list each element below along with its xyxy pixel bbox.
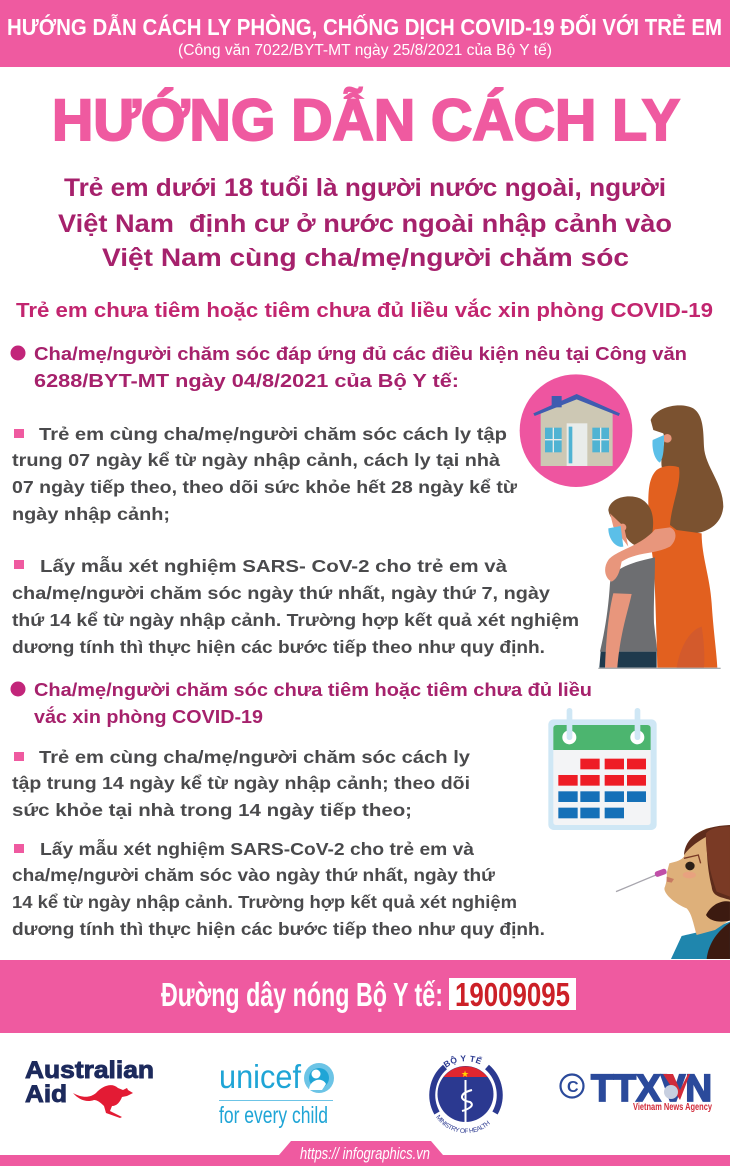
condition 1 item 1: trung 07 ngày kể từ ngày nhập cảnh, cách ly tại nhà: [12, 450, 500, 470]
unicef emblem: [304, 1063, 334, 1093]
condition 1 item 1: 07 ngày tiếp theo, theo dõi sức khỏe hết 28 ngày kể từ: [12, 477, 517, 497]
logo: Ministry of Health: MINISTRY OF HEALTH: [436, 1114, 490, 1134]
logo: Australian Aid: Australian: [25, 1057, 154, 1084]
header band: [0, 0, 730, 67]
condition 2 item 2: 14 kể từ ngày nhập cảnh. Trường hợp kết quả xét nghiệm: [12, 892, 517, 912]
subtitle block: Trẻ em dưới 18 tuổi là người nước ngoài, người: [64, 174, 666, 202]
condition 2 heading: [10, 679, 592, 727]
condition 2 item 1: tập trung 14 ngày kể từ ngày nhập cảnh; theo dõi: [12, 773, 470, 793]
header subtitle: (Công văn 7022/BYT-MT ngày 25/8/2021 của Bộ Y tế): [178, 42, 552, 59]
condition 1 item 1: Trẻ em cùng cha/mẹ/người chăm sóc cách ly tập: [39, 424, 507, 444]
subtitle block: Việt Nam cùng cha/mẹ/người chăm sóc: [102, 244, 629, 272]
condition 1 item 2: [12, 555, 579, 657]
condition 1 item 2: dương tính thì thực hiện các bước tiếp theo như quy định.: [12, 637, 545, 657]
condition 1 item 1: [12, 424, 517, 524]
condition 2 item 1: Trẻ em cùng cha/mẹ/người chăm sóc cách ly: [39, 747, 470, 767]
condition 1 item 1: ngày nhập cảnh;: [12, 504, 170, 524]
hotline number: 19009095: [455, 976, 570, 1013]
condition 2 heading: vắc xin phòng COVID-19: [34, 706, 263, 727]
condition 1 heading: Cha/mẹ/người chăm sóc đáp ứng đủ các điều kiện nêu tại Công văn: [34, 343, 687, 364]
condition 2 item 2: Lấy mẫu xét nghiệm SARS-CoV-2 cho trẻ em và: [40, 838, 474, 859]
footer bar with url tab: [0, 1141, 730, 1166]
logo: Ministry of Health: BỘ Y TẾ: [443, 1055, 482, 1068]
condition 1 heading: [10, 343, 687, 391]
condition 2 heading: Cha/mẹ/người chăm sóc chưa tiêm hoặc tiêm chưa đủ liều: [34, 679, 592, 700]
condition 2 item 2: dương tính thì thực hiện các bước tiếp theo như quy định.: [12, 919, 545, 939]
child: [599, 496, 675, 668]
logo: TTXVN: TTXVN: [591, 1068, 712, 1110]
logo: Ministry of Health: [429, 1055, 503, 1134]
subtitle block: [58, 174, 672, 272]
url: https:// infographics.vn: [300, 1144, 430, 1163]
logo: Ministry of Health: ★: [461, 1069, 469, 1079]
logo: UNICEF: unicef: [219, 1058, 302, 1095]
main title: HƯỚNG DẪN CÁCH LY: [52, 88, 680, 153]
condition 1 item 2: cha/mẹ/người chăm sóc ngày thứ nhất, ngày thứ 7, ngày: [12, 583, 550, 603]
illustration: mother and child wearing masks: [598, 405, 723, 668]
condition 2 item 1: [12, 747, 470, 820]
icon: calendar: [548, 708, 657, 830]
hotline label: Đường dây nóng Bộ Y tế:: [161, 976, 443, 1013]
condition 2 item 1: sức khỏe tại nhà trong 14 ngày tiếp theo;: [12, 800, 412, 820]
hotline band: [0, 960, 730, 1033]
condition 2 item 2: [12, 838, 545, 939]
condition 1 heading: 6288/BYT-MT ngày 04/8/2021 của Bộ Y tế:: [34, 370, 459, 391]
logo: UNICEF: for every child: [219, 1102, 328, 1128]
condition 1 item 2: thứ 14 kể từ ngày nhập cảnh. Trường hợp kết quả xét nghiệm: [12, 610, 579, 630]
logo: Australian Aid: [25, 1057, 154, 1118]
mother: [648, 405, 723, 668]
logo: TTXVN: C: [567, 1079, 579, 1096]
section heading: Trẻ em chưa tiêm hoặc tiêm chưa đủ liều vắc xin phòng COVID-19: [16, 298, 713, 322]
logo: Australian Aid: Aid: [25, 1081, 67, 1108]
subtitle block: Việt Nam định cư ở nước ngoài nhập cảnh vào: [58, 210, 672, 238]
condition 1 item 2: Lấy mẫu xét nghiệm SARS- CoV-2 cho trẻ em và: [40, 555, 507, 576]
logo: UNICEF: [219, 1058, 334, 1128]
icon: house in pink circle: [520, 374, 632, 487]
condition 2 item 2: cha/mẹ/người chăm sóc vào ngày thứ nhất, ngày thứ: [12, 865, 495, 885]
illustration: girl taking nasal swab: [616, 825, 730, 959]
